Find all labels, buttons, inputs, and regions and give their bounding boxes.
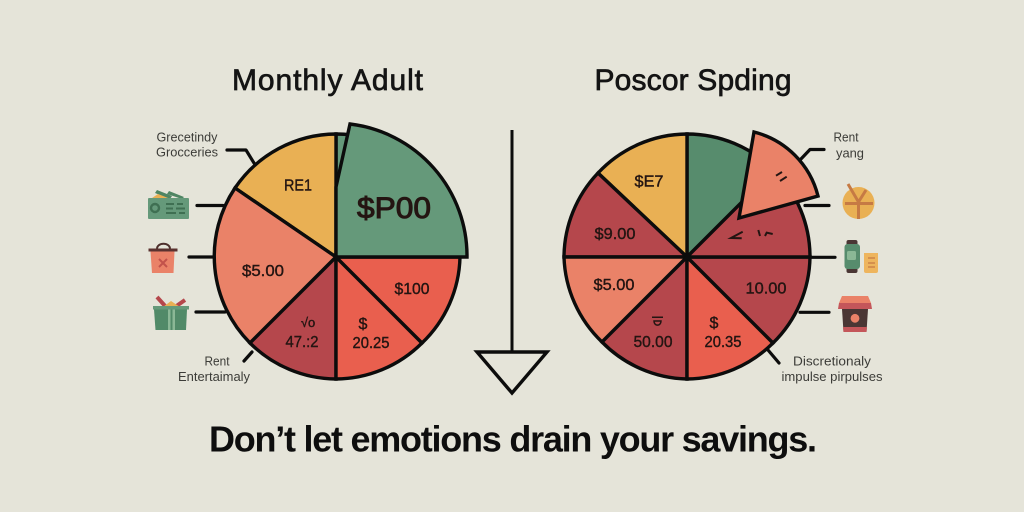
slice: red 20.25 bbox=[336, 257, 422, 379]
value: glyph above 47.:2: √o bbox=[301, 315, 315, 330]
title: Monthly Adult: Monthly Adult bbox=[232, 64, 424, 97]
icon: yellow circle with fork mark bbox=[842, 184, 874, 219]
value: RE1: RE1 bbox=[284, 178, 312, 194]
icon: green grocery basket bbox=[153, 297, 189, 330]
label: Grecetindy Groceries: Grocceries bbox=[156, 144, 218, 160]
value: $100: $100 bbox=[394, 281, 430, 298]
slice: dark red upper right bbox=[687, 170, 810, 257]
center divider arrow bbox=[477, 130, 547, 393]
label: Discretionaly impulse pirpulses: impulse pirpulses bbox=[782, 369, 883, 384]
slice: dark red 50.00 bbox=[602, 257, 687, 379]
label: Rent yang: yang bbox=[836, 146, 864, 160]
icon: green bottle and yellow jar bbox=[844, 240, 878, 273]
left leader lines bbox=[189, 150, 254, 361]
value: $: $ bbox=[710, 315, 719, 332]
value: $5.00: $5.00 bbox=[242, 263, 284, 280]
value: $P00: $P00 bbox=[357, 192, 431, 225]
value: 10.00: 10.00 bbox=[746, 280, 787, 298]
slice: salmon $5.00 bbox=[564, 257, 687, 342]
label: Discretionaly impulse pirpulses: Discretionaly bbox=[793, 354, 872, 368]
tagline: Don’t let emotions drain your savings. bbox=[209, 418, 817, 460]
right leader lines bbox=[768, 150, 835, 363]
slice: dark red $9.00 bbox=[564, 173, 687, 257]
slice: red 20.35 bbox=[687, 257, 773, 379]
value: $E7: $E7 bbox=[634, 174, 664, 190]
slice: dark red 47.:2 bbox=[250, 257, 336, 379]
value: $5.00: $5.00 bbox=[594, 277, 635, 294]
slice: green bbox=[687, 134, 774, 257]
slice: red $100 bbox=[336, 257, 460, 343]
slice: yellow $E7 bbox=[598, 134, 687, 257]
slice: exploded green wedge bbox=[336, 124, 467, 257]
label: Rent Entertaimaly: Rent bbox=[204, 354, 230, 368]
value: marks on upper right slice bbox=[731, 230, 773, 238]
left pie chart bbox=[214, 124, 467, 379]
value: 20.25: 20.25 bbox=[352, 335, 390, 352]
value: marks on salmon wedge bbox=[776, 172, 787, 181]
slice: salmon $5.00 bbox=[214, 188, 336, 343]
right pie chart bbox=[564, 132, 818, 379]
icon: red bucket bbox=[148, 244, 178, 273]
slice: small green behind wedge bbox=[336, 134, 352, 257]
value: glyph above 50.00 bbox=[652, 317, 663, 325]
value: 50.00: 50.00 bbox=[634, 334, 673, 351]
title: Poscor Spding: Poscor Spding bbox=[594, 64, 792, 97]
label: Rent Entertaimaly: Entertaimaly bbox=[178, 369, 250, 384]
value: 20.35: 20.35 bbox=[704, 334, 742, 351]
value: $9.00: $9.00 bbox=[594, 226, 636, 243]
icon: coffee cup bbox=[838, 296, 872, 332]
value: $: $ bbox=[359, 316, 368, 333]
label: Grecetindy Groceries bbox=[156, 130, 218, 160]
label: Grecetindy Groceries: Grecetindy bbox=[156, 130, 218, 144]
value: 47.:2: 47.:2 bbox=[286, 334, 319, 351]
icon: green radio wallet bbox=[148, 190, 189, 219]
label: Rent Entertaimaly bbox=[178, 354, 250, 384]
slice: dark red 10.00 bbox=[687, 257, 810, 343]
label: Discretionaly impulse pirpulses bbox=[782, 354, 883, 384]
label: Rent yang bbox=[834, 130, 864, 160]
slice: yellow RE1 bbox=[235, 134, 336, 257]
label: Rent yang: Rent bbox=[834, 130, 859, 144]
slice: exploded salmon wedge bbox=[739, 132, 818, 218]
